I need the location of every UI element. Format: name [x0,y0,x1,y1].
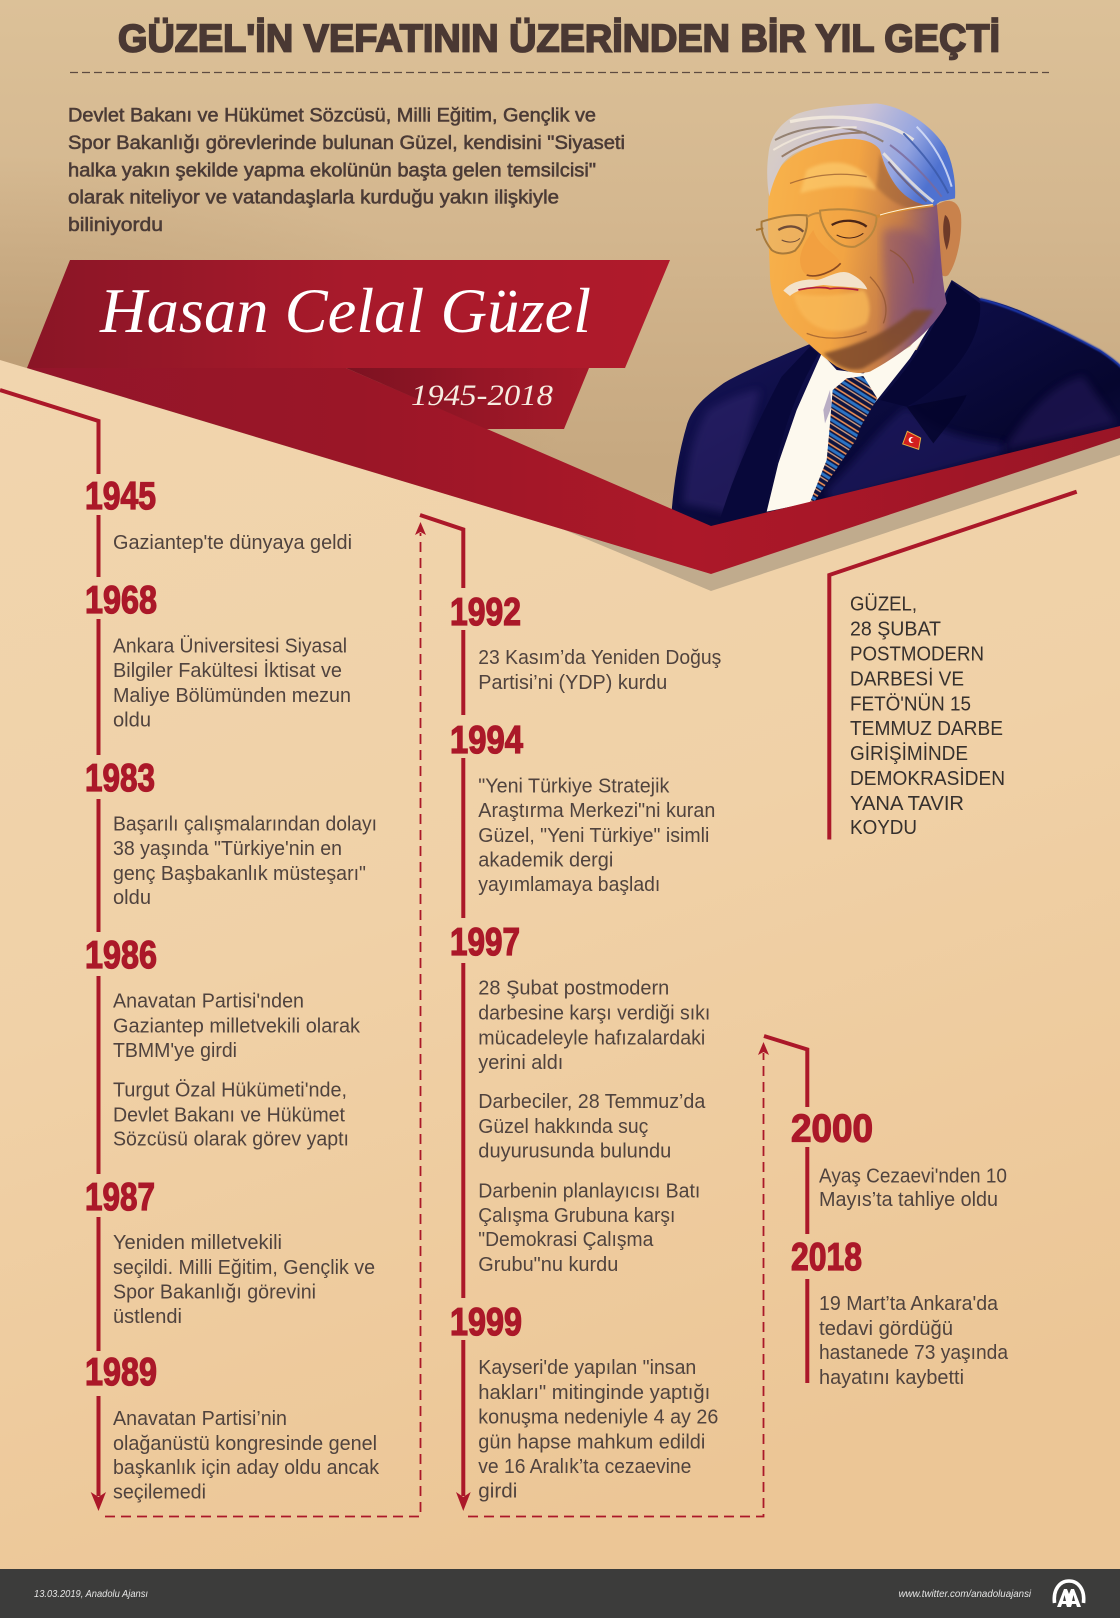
entry 1999: konuşma nedeniyle 4 ay 26 [478,1407,718,1429]
footer url: www.twitter.com/anadoluajansi [899,1588,1032,1600]
entry 1989 [85,1351,380,1504]
red ribbon chevron [27,368,1120,574]
entry 1983: genç Başbakanlık müsteşarı" [113,863,366,885]
callout: 28 Şubat statement: TEMMUZ DARBE [850,718,1003,740]
entry 1999: Kayseri'de yapılan "insan [478,1357,696,1379]
entry 1999: hakları" mitinginde yaptığı [478,1382,710,1404]
entry 2018: tedavi gördüğü [819,1318,953,1340]
entry 1994: yayımlamaya başladı [478,874,660,896]
entry 1997: Güzel hakkında suç [478,1116,648,1138]
entry 2018: 19 Mart’ta Ankara'da [819,1293,999,1315]
banner: years [346,368,589,429]
portrait: eyes [778,221,867,242]
portrait: ear [936,201,961,276]
entry 1994: "Yeni Türkiye Stratejik [478,776,670,798]
entry 2000 [791,1108,1007,1211]
entry 1987: Spor Bakanlığı görevini [113,1282,316,1304]
callout: 28 Şubat statement: GÜZEL, [850,594,917,616]
portrait: collar shadow [823,390,832,423]
entry 2000: 2000 [791,1108,873,1151]
callout: 28 Şubat statement: KOYDU [850,817,917,839]
intro paragraph: olarak niteliyor ve vatandaşlarla kurduğu yakın ilişkiyle [68,187,559,209]
entry 1945: 1945 [85,475,156,518]
intro paragraph [68,104,625,236]
callout: 28 Şubat statement: GİRİŞİMİNDE [850,742,968,765]
footer bar [0,1569,1120,1618]
entry 1968 [85,579,351,732]
portrait: mustache and mouth [783,272,867,296]
entry 1987: seçildi. Milli Eğitim, Gençlik ve [113,1257,375,1279]
entry 1997: 28 Şubat postmodern [478,978,669,1000]
entry 1983 [85,757,377,909]
entry 1945 [85,475,352,554]
timeline line: column 1 [0,390,106,1511]
entry 1989: başkanlık için aday oldu ancak [113,1457,380,1479]
entry 2018 [791,1236,1009,1389]
entry 2018: hayatını kaybetti [819,1367,964,1389]
timeline line: column 2 [420,515,471,1511]
callout: 28 Şubat statement: DEMOKRASİDEN [850,767,1005,790]
footer date: 13.03.2019, Anadolu Ajansı [34,1588,148,1600]
intro paragraph: Spor Bakanlığı görevlerinde bulunan Güzel, kendisini "Siyaseti [68,132,625,154]
entry 1983: Başarılı çalışmalarından dolayı [113,814,377,836]
entry 1986: Turgut Özal Hükümeti'nde, [113,1079,347,1101]
entry 1986 [85,934,361,1151]
entry 1994 [450,719,715,896]
entry 1986: Anavatan Partisi'nden [113,990,304,1012]
entry 1987: üstlendi [113,1306,182,1328]
portrait: white shirt [767,307,943,512]
timeline line: column 3 [764,1036,807,1383]
title: GÜZEL'İN VEFATININ ÜZERİNDEN BİR YIL GEÇTİ [118,18,1000,60]
entry 1968: Bilgiler Fakültesi İktisat ve [113,659,342,682]
entry 1987: Yeniden milletvekili [113,1232,282,1254]
name: Hasan Celal Güzel: Hasan Celal Güzel [99,276,591,346]
entry 1987 [85,1176,375,1328]
callout: 28 Şubat statement: YANA TAVIR [850,793,964,815]
ribbon shadow [560,436,1120,591]
entry 1997: yerini aldı [478,1052,563,1074]
entry 1997 [450,921,710,1276]
portrait: hair strands [773,117,952,202]
entry 1989: seçilemedi [113,1482,206,1504]
portrait: suit jacket [672,280,1120,528]
callout line [829,492,1077,840]
entry 1968: oldu [113,710,151,732]
entry 1968: 1968 [85,579,157,622]
intro paragraph: halka yakın şekilde yapma ekolünün başta gelen temsilcisi" [68,159,596,181]
background: upper tan area [0,0,1120,620]
entry 1986: 1986 [85,934,157,977]
portrait: striped tie [810,376,877,502]
entry 2018: hastanede 73 yaşında [819,1342,1009,1364]
portrait: flag pin [903,431,921,449]
background: light parchment body [0,360,1120,1618]
entry 1992 [450,591,721,694]
entry 1999: ve 16 Aralık’ta cezaevine [478,1456,691,1478]
banner: name [27,260,670,368]
entry 1986: Gaziantep milletvekili olarak [113,1016,361,1038]
intro paragraph: biliniyordu [68,214,163,236]
entry 1997: Darbeciler, 28 Temmuz’da [478,1091,706,1113]
entry 1968: Maliye Bölümünden mezun [113,685,351,707]
entry 1997: Darbenin planlayıcısı Batı [478,1180,700,1202]
entry 2000: Mayıs’ta tahliye oldu [819,1189,998,1211]
entry 1992: 1992 [450,591,521,634]
dashed connector: column 1 to column 2 [105,522,426,1516]
dashed connector: column 2 to column 3 [468,1042,769,1516]
entry 1994: 1994 [450,719,523,762]
intro paragraph: Devlet Bakanı ve Hükümet Sözcüsü, Milli Eğitim, Gençlik ve [68,104,596,126]
portrait: hair [767,103,955,207]
entry 1997: darbesine karşı verdiği sıkı [478,1003,710,1025]
entry 1989: Anavatan Partisi’nin [113,1408,287,1430]
portrait of Hasan Celal Güzel [672,103,1120,528]
entry 1997: duyurusunda bulundu [478,1140,671,1162]
entry 1992: 23 Kasım’da Yeniden Doğuş [478,647,721,669]
entry 1968: Ankara Üniversitesi Siyasal [113,636,347,658]
entry 1997: Grubu"nu kurdu [478,1254,618,1276]
entry 1983: oldu [113,887,151,909]
entry 1983: 1983 [85,757,155,800]
entry 1983: 38 yaşında "Türkiye'nin en [113,838,342,860]
entry 1999: 1999 [450,1301,522,1344]
entry 1997: 1997 [450,921,520,964]
entry 1992: Partisi’ni (YDP) kurdu [478,672,667,694]
entry 1999 [450,1301,718,1502]
entry 1999: gün hapse mahkum edildi [478,1432,705,1454]
icon: Anadolu Agency logo [1054,1581,1084,1607]
entry 1986: Sözcüsü olarak görev yaptı [113,1129,349,1151]
entry 1997: mücadeleyle hafızalardaki [478,1028,705,1050]
portrait: face [768,139,947,373]
entry 1987: 1987 [85,1176,155,1219]
portrait: glasses [756,205,933,253]
callout: 28 Şubat statement: FETÖ'NÜN 15 [850,694,971,716]
callout: 28 Şubat statement: POSTMODERN [850,644,984,666]
callout: 28 Şubat statement [850,594,1005,839]
entry 1999: girdi [478,1480,517,1502]
entry 1994: Araştırma Merkezi"ni kuran [478,800,715,822]
callout: 28 Şubat statement: DARBESİ VE [850,668,964,691]
years 1945-2018: 1945-2018 [411,379,553,412]
entry 1997: "Demokrasi Çalışma [478,1229,654,1251]
entry 1989: 1989 [85,1351,157,1394]
entry 2000: Ayaş Cezaevi'nden 10 [819,1165,1007,1187]
entry 1986: TBMM'ye girdi [113,1040,237,1062]
entry 1945: Gaziantep'te dünyaya geldi [113,532,352,554]
entry 1989: olağanüstü kongresinde genel [113,1433,377,1455]
entry 1997: Çalışma Grubuna karşı [478,1205,675,1227]
callout: 28 Şubat statement: 28 ŞUBAT [850,619,941,641]
entry 1986: Devlet Bakanı ve Hükümet [113,1104,345,1126]
entry 1994: Güzel, "Yeni Türkiye" isimli [478,825,709,847]
entry 2018: 2018 [791,1236,862,1279]
entry 1994: akademik dergi [478,850,613,872]
